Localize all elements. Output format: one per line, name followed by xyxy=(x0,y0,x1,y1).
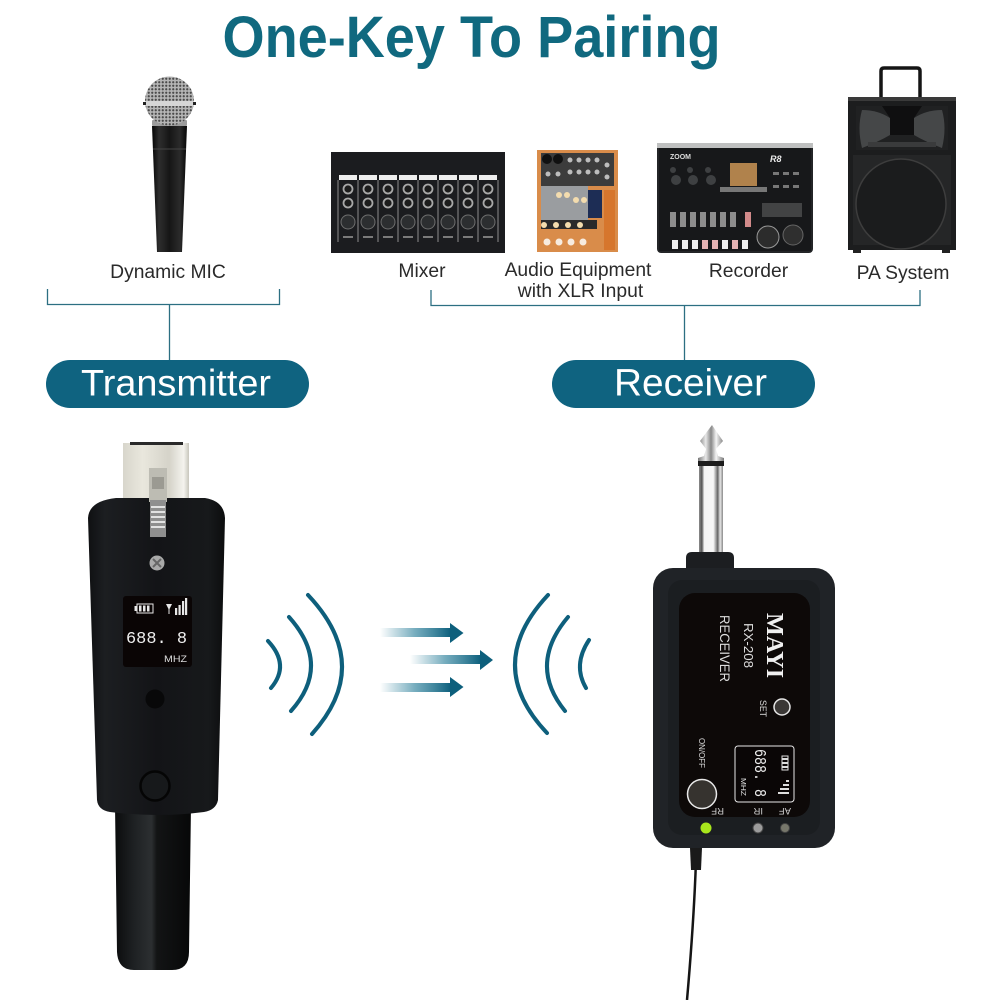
jack plug xyxy=(698,425,724,553)
black face plate: RECEIVER xyxy=(717,615,732,682)
icon: audio equipment with XLR input xyxy=(537,150,618,252)
receiver display: MHZ xyxy=(739,778,746,797)
label: PA System: PA System xyxy=(857,263,949,284)
label: Dynamic MIC: Dynamic MIC xyxy=(110,262,226,283)
black face plate xyxy=(679,593,810,817)
XLR transmitter device xyxy=(88,442,225,970)
black face plate: MAYI xyxy=(761,613,787,678)
black face plate: ON/OFF xyxy=(697,738,706,768)
signal waves: transmitter xyxy=(268,595,342,734)
label: Recorder: Recorder xyxy=(709,261,789,282)
OLED display xyxy=(123,596,192,667)
icon: digital recorder: R8 xyxy=(770,154,782,164)
OLED display: MHZ xyxy=(164,654,187,665)
pill: Receiver xyxy=(552,360,815,408)
label: Audio Equipment with XLR Input: with XLR Input xyxy=(517,281,644,302)
OLED display: 688. 8 xyxy=(126,630,187,649)
receiver display: 688. 8 xyxy=(750,749,769,797)
cable xyxy=(687,860,696,1000)
black face plate: SET xyxy=(757,700,768,717)
6.35mm plug receiver device xyxy=(653,425,835,1000)
label: Mixer: Mixer xyxy=(398,261,446,282)
body xyxy=(88,498,225,815)
icon: PA speaker xyxy=(848,68,956,253)
receiver body xyxy=(653,568,835,848)
grip xyxy=(115,805,191,970)
icon: passive mixer xyxy=(331,152,505,253)
black face plate: IR xyxy=(753,805,763,816)
bracket: receiver xyxy=(431,290,920,360)
power button xyxy=(140,772,170,800)
latch xyxy=(149,468,167,537)
pill: Transmitter: Transmitter xyxy=(81,362,271,404)
label: Audio Equipment with XLR Input: Audio Equipment xyxy=(505,260,652,281)
black face plate: AF xyxy=(779,805,791,816)
receiver display xyxy=(735,746,794,802)
pill: Transmitter xyxy=(46,360,309,408)
black face plate: RX-208 xyxy=(741,623,756,668)
icon: digital recorder xyxy=(657,143,813,253)
pill: Receiver: Receiver xyxy=(614,362,767,404)
LEDs xyxy=(700,822,712,834)
bracket: transmitter xyxy=(48,289,280,360)
screw xyxy=(150,556,164,570)
power button xyxy=(688,780,716,808)
IR window xyxy=(146,690,164,708)
signal waves: receiver xyxy=(515,595,589,733)
black face plate: RF xyxy=(711,805,724,816)
icon: digital recorder: ZOOM xyxy=(670,154,691,161)
icon: dynamic microphone xyxy=(143,76,196,252)
arrows: signal direction xyxy=(380,623,493,697)
XLR connector xyxy=(123,442,189,503)
title: One-Key To Pairing xyxy=(222,5,720,70)
